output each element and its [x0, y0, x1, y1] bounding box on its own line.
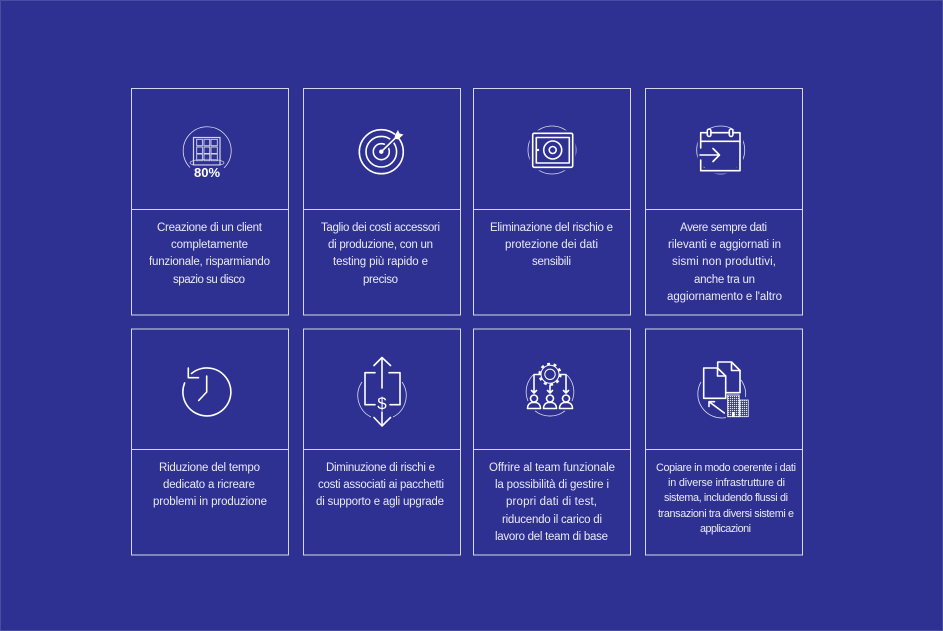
- icon: target: [359, 130, 404, 174]
- text: protezione dati: Eliminazione del rischio e: [490, 222, 613, 234]
- text: riduzione tempo: Riduzione del tempo: [159, 462, 260, 474]
- icon: dollar arrows: $: [377, 394, 387, 413]
- text: dati aggiornati: [667, 222, 782, 303]
- text: taglio dei costi: [321, 222, 440, 286]
- text: client completo: spazio su disco: [173, 274, 245, 286]
- text: copia dati: [656, 462, 796, 535]
- panel: costi pacchetti: [304, 329, 460, 555]
- text: costi pacchetti: costi associati ai pacchetti: [318, 479, 444, 491]
- text: team funzionale: la possibilità di gestire i: [495, 479, 609, 491]
- text: team funzionale: [489, 462, 615, 543]
- text: protezione dati: protezione dei dati: [505, 239, 598, 251]
- text: taglio dei costi: Taglio dei costi accessori: [321, 222, 440, 234]
- panel: riduzione tempo: [132, 329, 288, 555]
- text: dati aggiornati: rilevanti e aggiornati in: [668, 239, 781, 251]
- text: client completo: [149, 222, 270, 286]
- text: client completo: Creazione di un client: [157, 222, 263, 234]
- panel: protezione dati: [474, 88, 630, 315]
- text: riduzione tempo: problemi in produzione: [153, 496, 267, 508]
- text: copia dati: sistema, includendo flussi di: [664, 492, 788, 504]
- icon: gear and team: [526, 364, 574, 416]
- text: copia dati: transazioni tra diversi sistemi e: [658, 508, 794, 520]
- text: client completo: completamente: [171, 239, 248, 251]
- text: team funzionale: lavoro del team di base: [495, 531, 608, 543]
- text: protezione dati: sensibili: [532, 256, 571, 268]
- text: riduzione tempo: [153, 462, 267, 508]
- text: costi pacchetti: di supporto e agli upgrade: [316, 496, 444, 508]
- panel: copia dati: [646, 329, 802, 555]
- icon: calendar arrow: [697, 126, 745, 174]
- icon: safe: [528, 126, 576, 174]
- text: taglio dei costi: di produzione, con un: [328, 239, 433, 251]
- text: team funzionale: propri dati di test,: [506, 496, 597, 508]
- panel: dati aggiornati: [646, 88, 802, 315]
- text: copia dati: applicazioni: [700, 523, 751, 535]
- text: copia dati: in diverse infrastrutture di: [668, 477, 785, 489]
- text: client completo: funzionale, risparmiando: [149, 256, 270, 268]
- icon: dollar arrows: [358, 358, 406, 426]
- text: costi pacchetti: Diminuzione di rischi e: [326, 462, 435, 474]
- text: riduzione tempo: dedicato a ricreare: [163, 479, 255, 491]
- panel: team funzionale: [474, 329, 630, 555]
- text: costi pacchetti: [316, 462, 444, 508]
- text: dati aggiornati: Avere sempre dati: [680, 222, 767, 234]
- text: team funzionale: Offrire al team funzionale: [489, 462, 615, 474]
- text: taglio dei costi: testing più rapido e: [333, 256, 428, 268]
- icon: disk window 80%: 80%: [194, 165, 220, 180]
- panel: taglio dei costi: [304, 88, 460, 315]
- icon: disk window 80%: [183, 127, 231, 180]
- text: taglio dei costi: preciso: [363, 274, 398, 286]
- text: team funzionale: riducendo il carico di: [502, 514, 602, 526]
- icon: documents and buildings: [698, 362, 748, 418]
- text: dati aggiornati: aggiornamento e l'altro: [667, 291, 782, 303]
- text: protezione dati: [490, 222, 613, 268]
- text: dati aggiornati: anche tra un: [694, 274, 755, 286]
- icon: clock history: [183, 368, 231, 416]
- text: dati aggiornati: sismi non produttivi,: [672, 256, 776, 268]
- text: copia dati: Copiare in modo coerente i dati: [656, 462, 796, 474]
- panel: client completo: [132, 88, 288, 315]
